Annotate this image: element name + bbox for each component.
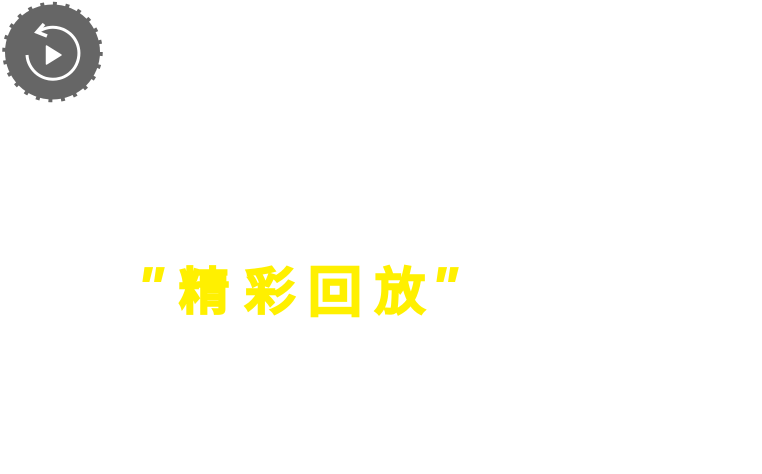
icon: replay badge — [2, 2, 103, 102]
play triangle — [46, 46, 61, 64]
heading: 精彩回放 — [137, 255, 459, 323]
character 回: 回 — [308, 263, 362, 323]
character 彩: 彩 — [245, 264, 295, 320]
character 精: 精 — [179, 264, 229, 320]
opening quote: " — [137, 255, 164, 318]
closing quote: " — [431, 255, 458, 318]
character 放: 放 — [375, 264, 425, 320]
replay arrow ring — [27, 24, 79, 79]
gear disc with teeth — [4, 4, 101, 100]
